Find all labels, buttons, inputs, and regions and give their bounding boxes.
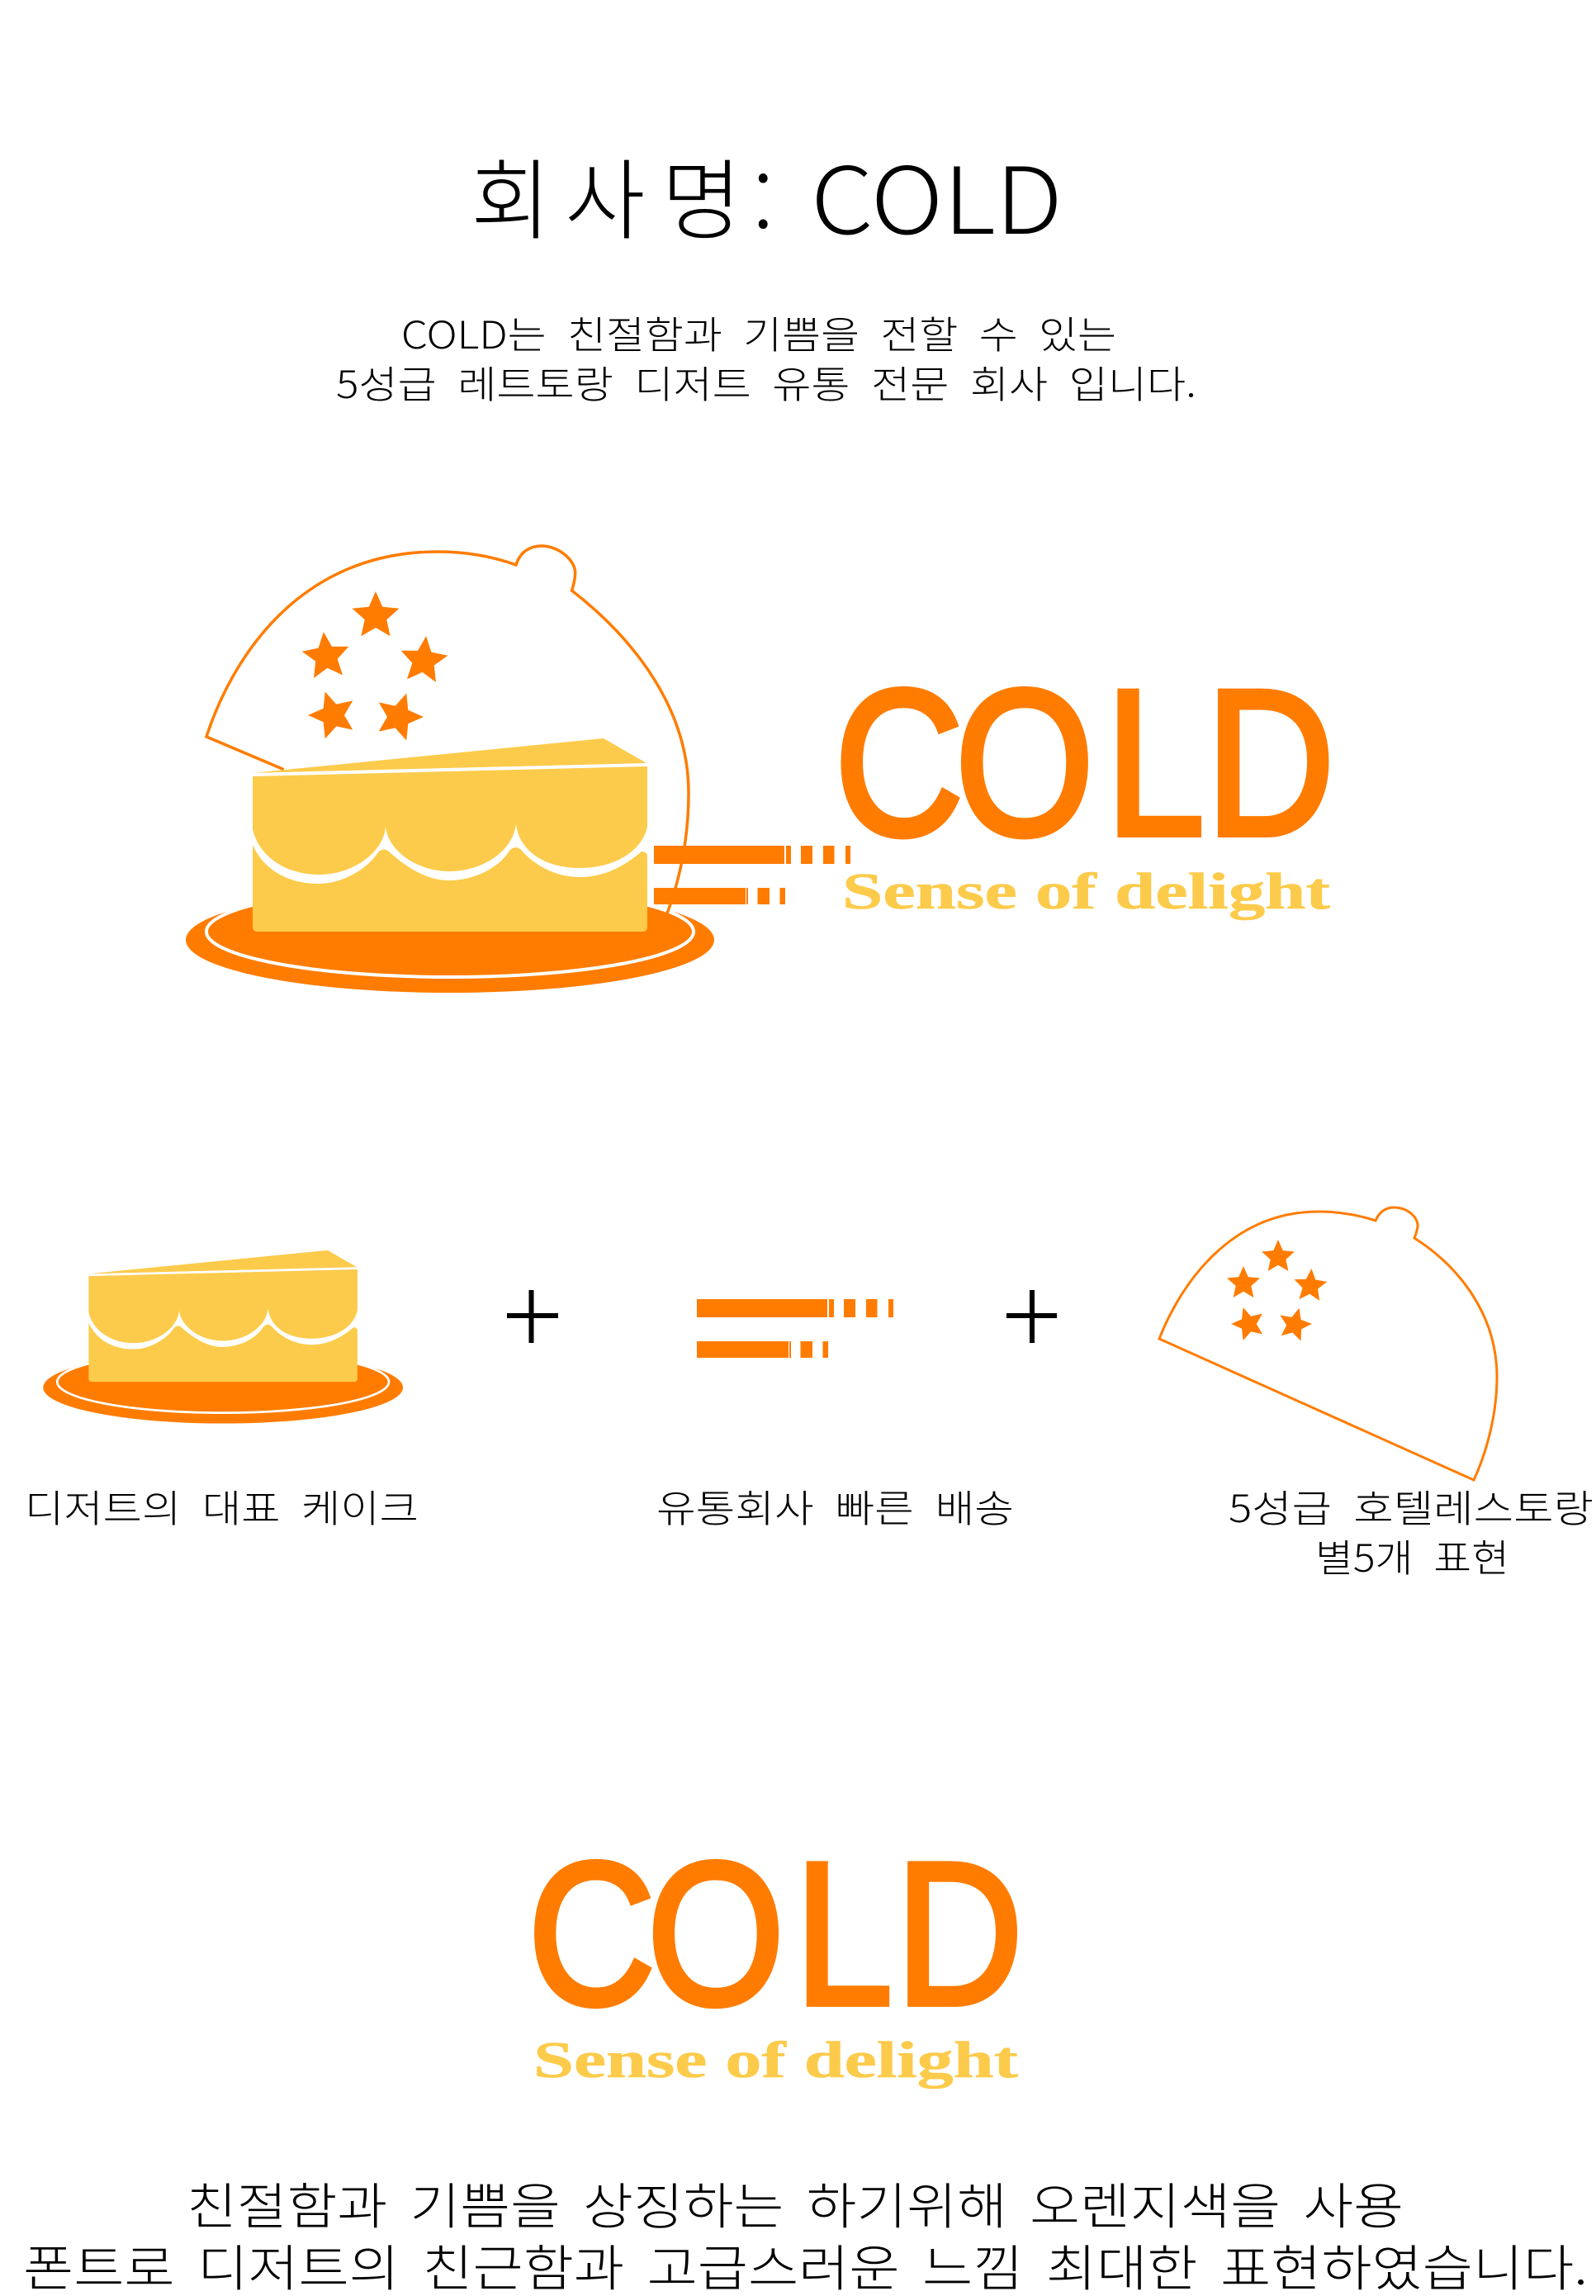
- title: 회사명:: [471, 130, 774, 263]
- stars: [301, 591, 449, 743]
- title: [471, 127, 1063, 263]
- plus sign 2: [1006, 1290, 1057, 1343]
- lower wordmark: COLD: [528, 1819, 1023, 2047]
- intro text: COLD는 친절함과 기쁨을 전할 수 있는: [401, 306, 1116, 360]
- lower tagline: Sense of delight: [533, 2033, 1018, 2089]
- intro text: [336, 306, 1196, 410]
- title: COLD: [811, 127, 1063, 261]
- speed lines: [654, 846, 850, 904]
- small dome outline: [1159, 1207, 1497, 1480]
- cake slice: [250, 738, 649, 932]
- dome cover: [206, 546, 689, 913]
- main wordmark: COLD: [834, 646, 1335, 879]
- component: cake icon: [43, 1250, 403, 1424]
- plus sign 1: [507, 1290, 558, 1343]
- tagline: Sense of delight: [842, 864, 1330, 920]
- main logo emblem: [186, 546, 850, 993]
- closing text: 친절함과 기쁨을 상징하는 하기위해 오렌지색을 사용: [187, 2167, 1404, 2239]
- caption: delivery: 유통회사 빠른 배송: [656, 1479, 1014, 1534]
- caption: five stars: [1229, 1479, 1594, 1583]
- component: dome with stars icon: [1159, 1207, 1497, 1480]
- intro text: 5성급 레트토랑 디저트 유통 전문 회사 입니다.: [336, 355, 1196, 410]
- caption: five stars: 5성급 호텔레스토랑: [1229, 1479, 1594, 1534]
- closing text: [23, 2167, 1588, 2296]
- caption: five stars: 별5개 표현: [1315, 1529, 1509, 1583]
- small stars: [1227, 1240, 1328, 1343]
- caption: cake: 디저트의 대표 케이크: [25, 1479, 419, 1534]
- component: speed lines icon: [697, 1299, 893, 1358]
- plate: [186, 886, 714, 993]
